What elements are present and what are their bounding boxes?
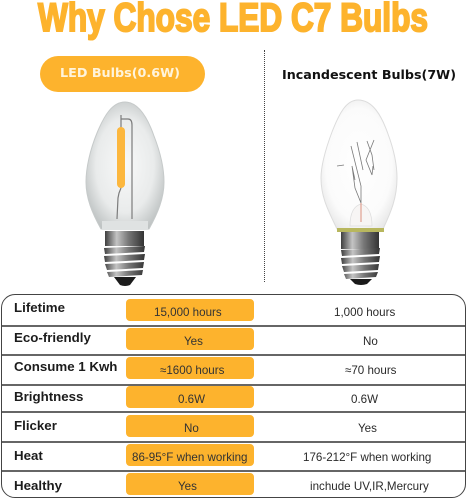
row: Consume 1 Kwh	[14, 357, 396, 379]
row: Flicker: Flicker	[14, 418, 57, 433]
LED bulbs pill heading	[40, 56, 205, 92]
row: Brightness	[14, 386, 378, 408]
row: Lifetime: 15,000 hours	[154, 306, 222, 319]
incandescent heading: Incandescent Bulbs(7W)	[282, 68, 456, 82]
row: Healthy	[14, 473, 429, 495]
row: Flicker: No	[184, 422, 199, 435]
row: Eco-friendly: Eco-friendly	[14, 330, 91, 345]
row: Heat: 86-95°F when working	[132, 451, 247, 464]
row: Heat: Heat	[14, 448, 43, 463]
row: Flicker: Yes	[358, 422, 377, 435]
icon: LED bulb	[86, 102, 164, 286]
row: Brightness: Brightness	[14, 389, 83, 404]
row: Lifetime: 1,000 hours	[334, 306, 395, 319]
row: Lifetime	[14, 299, 395, 321]
row: Eco-friendly	[14, 328, 378, 350]
row: Brightness: 0.6W	[351, 393, 378, 406]
table frame	[1, 294, 466, 498]
row: Flicker	[14, 415, 377, 437]
dotted divider	[264, 50, 265, 282]
row: Heat: 176-212°F when working	[303, 451, 431, 464]
row: Consume 1 Kwh: ≈1600 hours	[160, 364, 224, 377]
row: Brightness: 0.6W	[178, 393, 205, 406]
icon: incandescent bulb	[320, 100, 398, 285]
row: Eco-friendly: Yes	[184, 335, 203, 348]
row: Lifetime: Lifetime	[14, 300, 65, 315]
LED bulbs pill heading: LED Bulbs(0.6W)	[60, 66, 180, 80]
row: Consume 1 Kwh: ≈70 hours	[345, 364, 396, 377]
row: Heat	[14, 444, 431, 466]
row: Healthy: Healthy	[14, 478, 62, 493]
row: Healthy: Yes	[178, 480, 197, 493]
row: Healthy: inchude UV,IR,Mercury	[310, 480, 429, 493]
row: Consume 1 Kwh: Consume 1 Kwh	[14, 359, 117, 374]
row: Eco-friendly: No	[363, 335, 378, 348]
